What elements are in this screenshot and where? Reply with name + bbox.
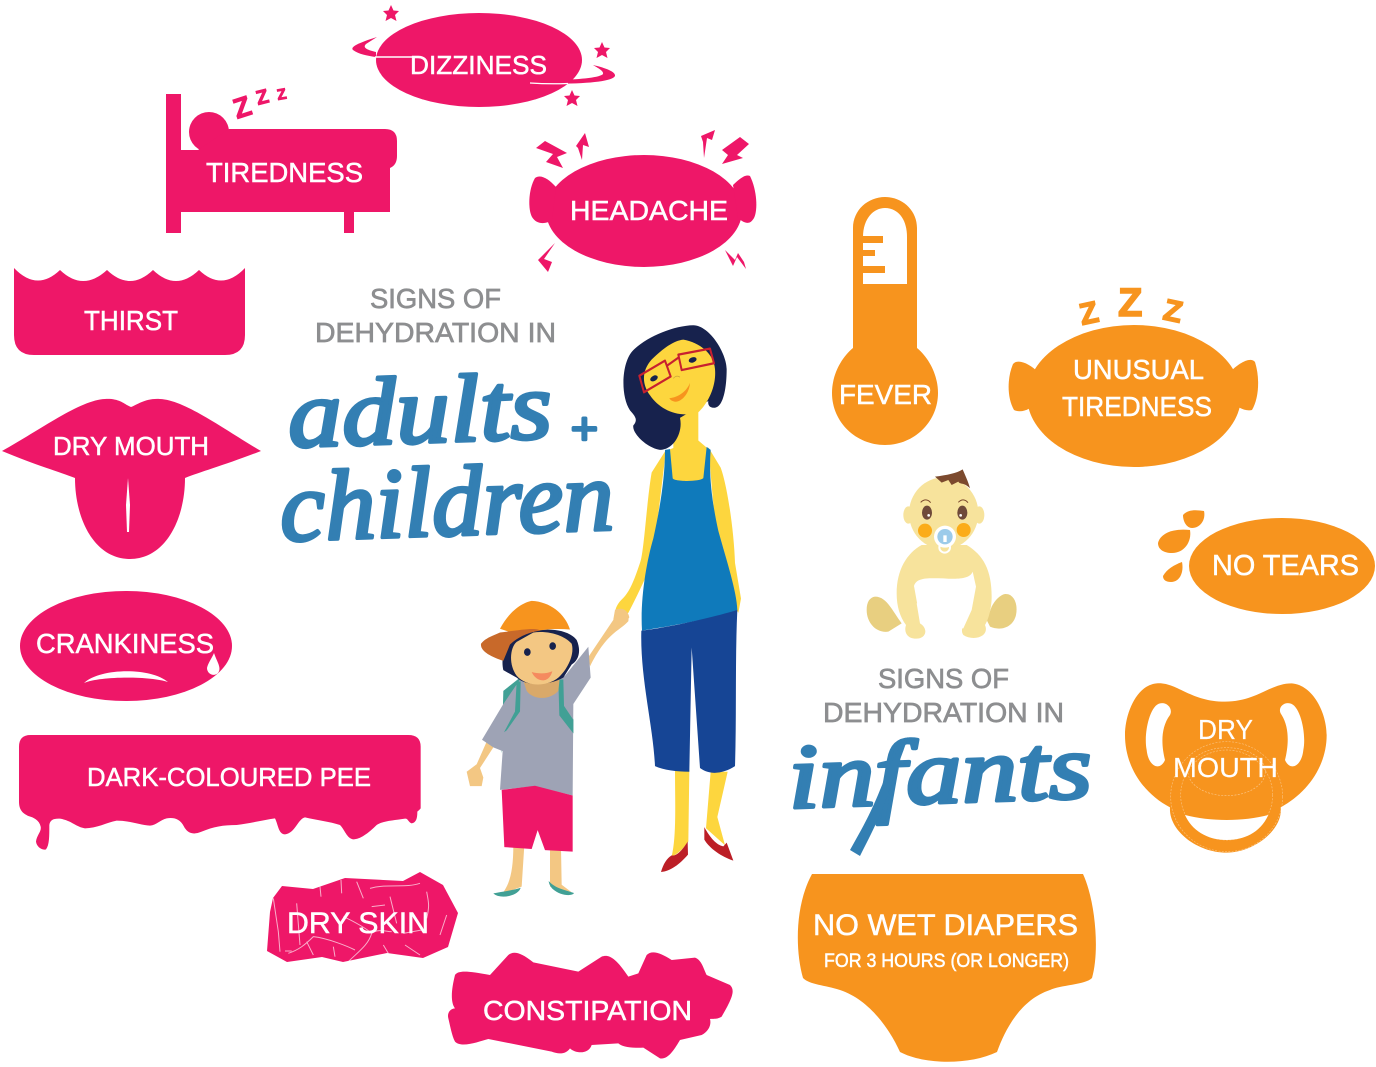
- child head and hat: [481, 601, 579, 698]
- badge: tiredness bed: Z: [254, 86, 271, 110]
- child pink shorts: [502, 786, 573, 852]
- badge: tiredness bed: Z: [229, 90, 255, 125]
- badge: unusual tiredness: UNUSUAL: [1073, 354, 1204, 385]
- child backpack: [502, 678, 573, 753]
- baby diaper: [914, 572, 976, 628]
- child backpack straps: [504, 680, 573, 733]
- heading: signs of dehydration in adults and children: DEHYDRATION IN: [315, 317, 556, 348]
- script title: infants: [786, 715, 1094, 856]
- badge: unusual tiredness: [1009, 281, 1258, 467]
- badge: dry mouth pacifier: [1125, 683, 1327, 853]
- badge: no wet diapers: [798, 874, 1096, 1062]
- child arms: [467, 612, 629, 786]
- heading: signs of dehydration in infants: DEHYDRATION IN: [823, 697, 1064, 728]
- badge: crankiness: [20, 591, 232, 701]
- badge: dizziness: [352, 5, 615, 107]
- badge: unusual tiredness: Z: [1118, 281, 1142, 325]
- badge: dry mouth lips and tongue: [2, 399, 261, 559]
- badge: constipation: [448, 952, 733, 1058]
- script title: infants: infants: [786, 715, 1094, 828]
- badge: fever thermometer: [832, 197, 938, 445]
- badge: crankiness: CRANKINESS: [36, 628, 214, 659]
- baby body: [897, 545, 992, 639]
- heading: signs of dehydration in infants: [823, 663, 1064, 728]
- badge: dry mouth pacifier: DRY: [1198, 714, 1253, 745]
- woman legs and shoes: [661, 770, 733, 872]
- illustration: woman: [467, 325, 741, 897]
- heading: signs of dehydration in adults and children: [315, 283, 556, 348]
- badge: headache: [529, 130, 756, 272]
- badge: no tears: [1158, 510, 1375, 614]
- child shirt: [482, 647, 591, 796]
- badge: dry skin: [267, 872, 458, 962]
- script title: adults + children: children: [278, 440, 616, 563]
- badge: dry mouth pacifier: MOUTH: [1173, 752, 1278, 783]
- script title: adults + children: [278, 352, 616, 563]
- badge: tiredness bed: [166, 86, 397, 233]
- badge: tiredness bed: TIREDNESS: [206, 157, 363, 188]
- woman blue top: [642, 447, 737, 631]
- badge: thirst water: THIRST: [84, 305, 178, 336]
- woman hair: [623, 325, 727, 450]
- script title: adults + children: adults: [286, 352, 554, 468]
- badge: dark-coloured pee: [19, 735, 421, 850]
- badge: dark-coloured pee: DARK-COLOURED PEE: [87, 762, 371, 792]
- baby head: [903, 469, 984, 553]
- badge: no tears: NO TEARS: [1212, 550, 1359, 582]
- badge: unusual tiredness: Z: [1161, 294, 1185, 330]
- badge: dry mouth lips and tongue: DRY MOUTH: [53, 431, 209, 461]
- badge: no wet diapers: NO WET DIAPERS: [813, 909, 1078, 942]
- heading: signs of dehydration in infants: SIGNS OF: [878, 663, 1009, 694]
- illustration: baby with pacifier: [867, 469, 1017, 639]
- script title: adults + children: +: [568, 403, 600, 454]
- heading: signs of dehydration in adults and children: SIGNS OF: [370, 283, 501, 314]
- baby feet: [867, 594, 1017, 632]
- badge: unusual tiredness: TIREDNESS: [1062, 391, 1212, 422]
- badge: constipation: CONSTIPATION: [483, 995, 692, 1026]
- badge: unusual tiredness: Z: [1077, 296, 1101, 332]
- badge: no wet diapers: FOR 3 HOURS (OR LONGER): [824, 951, 1069, 972]
- badge: tiredness bed: Z: [276, 86, 288, 104]
- child legs and sandals: [493, 845, 574, 897]
- clasped hands: [613, 609, 629, 623]
- badge: dizziness: DIZZINESS: [410, 50, 547, 80]
- woman navy trousers: [641, 610, 737, 773]
- badge: thirst water: [14, 268, 245, 355]
- woman arms and neck: [615, 410, 741, 619]
- woman face: [639, 340, 715, 414]
- badge: dry skin: DRY SKIN: [287, 907, 429, 940]
- badge: headache: HEADACHE: [570, 195, 728, 226]
- badge: fever thermometer: FEVER: [839, 379, 932, 410]
